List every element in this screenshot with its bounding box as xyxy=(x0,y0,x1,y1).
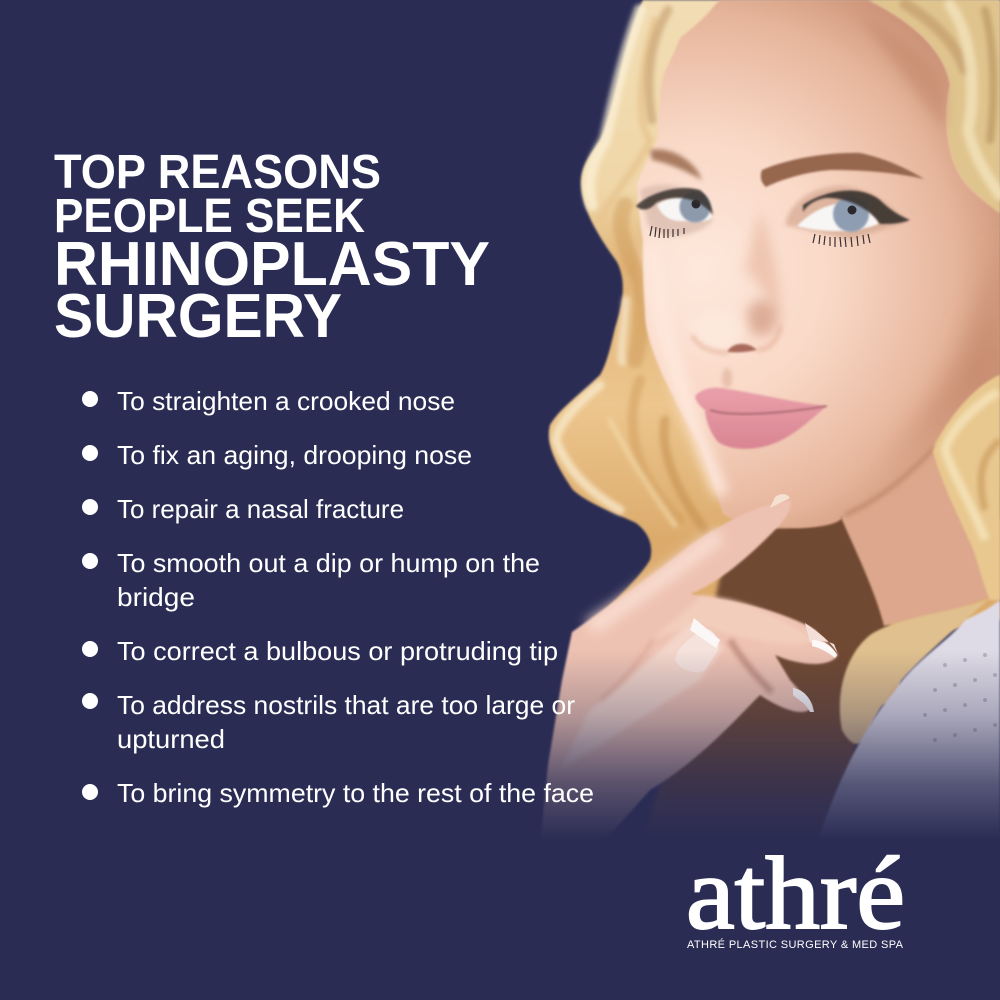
face xyxy=(637,0,1000,528)
reason 2: To fix an aging, drooping nose xyxy=(117,440,472,470)
reason 3: To repair a nasal fracture xyxy=(117,494,404,524)
lips xyxy=(695,388,827,449)
title: RHINOPLASTY xyxy=(54,230,490,299)
portrait photo of woman xyxy=(542,0,1000,830)
left eyebrow xyxy=(650,149,702,180)
reason 4: bridge xyxy=(117,582,195,612)
title: PEOPLE SEEK xyxy=(54,190,365,243)
reason 7: To bring symmetry to the rest of the face xyxy=(117,778,594,808)
title: TOP REASONS xyxy=(54,146,381,199)
hair lock xyxy=(840,598,990,744)
hair xyxy=(549,0,1000,770)
logo: ATHRÉ PLASTIC SURGERY & MED SPA xyxy=(687,938,904,951)
right eye xyxy=(785,186,910,247)
reason 5: To correct a bulbous or protruding tip xyxy=(117,636,558,666)
left eye xyxy=(636,185,713,238)
reason 1: To straighten a crooked nose xyxy=(117,386,455,416)
reason 4: To smooth out a dip or hump on the xyxy=(117,548,540,578)
sweater xyxy=(824,600,1000,830)
bottom fade xyxy=(539,659,1000,839)
neck xyxy=(785,445,1000,626)
right eyebrow xyxy=(761,153,924,187)
title: SURGERY xyxy=(54,282,342,351)
nose xyxy=(690,210,781,388)
title xyxy=(54,146,490,351)
bullet list of reasons xyxy=(82,386,594,808)
dark hair behind the neck xyxy=(654,516,892,814)
reason 6 xyxy=(82,690,575,754)
reason 6: upturned xyxy=(117,724,225,754)
face shading xyxy=(652,15,1000,515)
logo: athré xyxy=(686,836,905,951)
reason 6: To address nostrils that are too large or xyxy=(117,690,575,720)
right hair curl xyxy=(933,375,1000,600)
reason 4 xyxy=(82,548,540,612)
hand xyxy=(540,494,838,846)
